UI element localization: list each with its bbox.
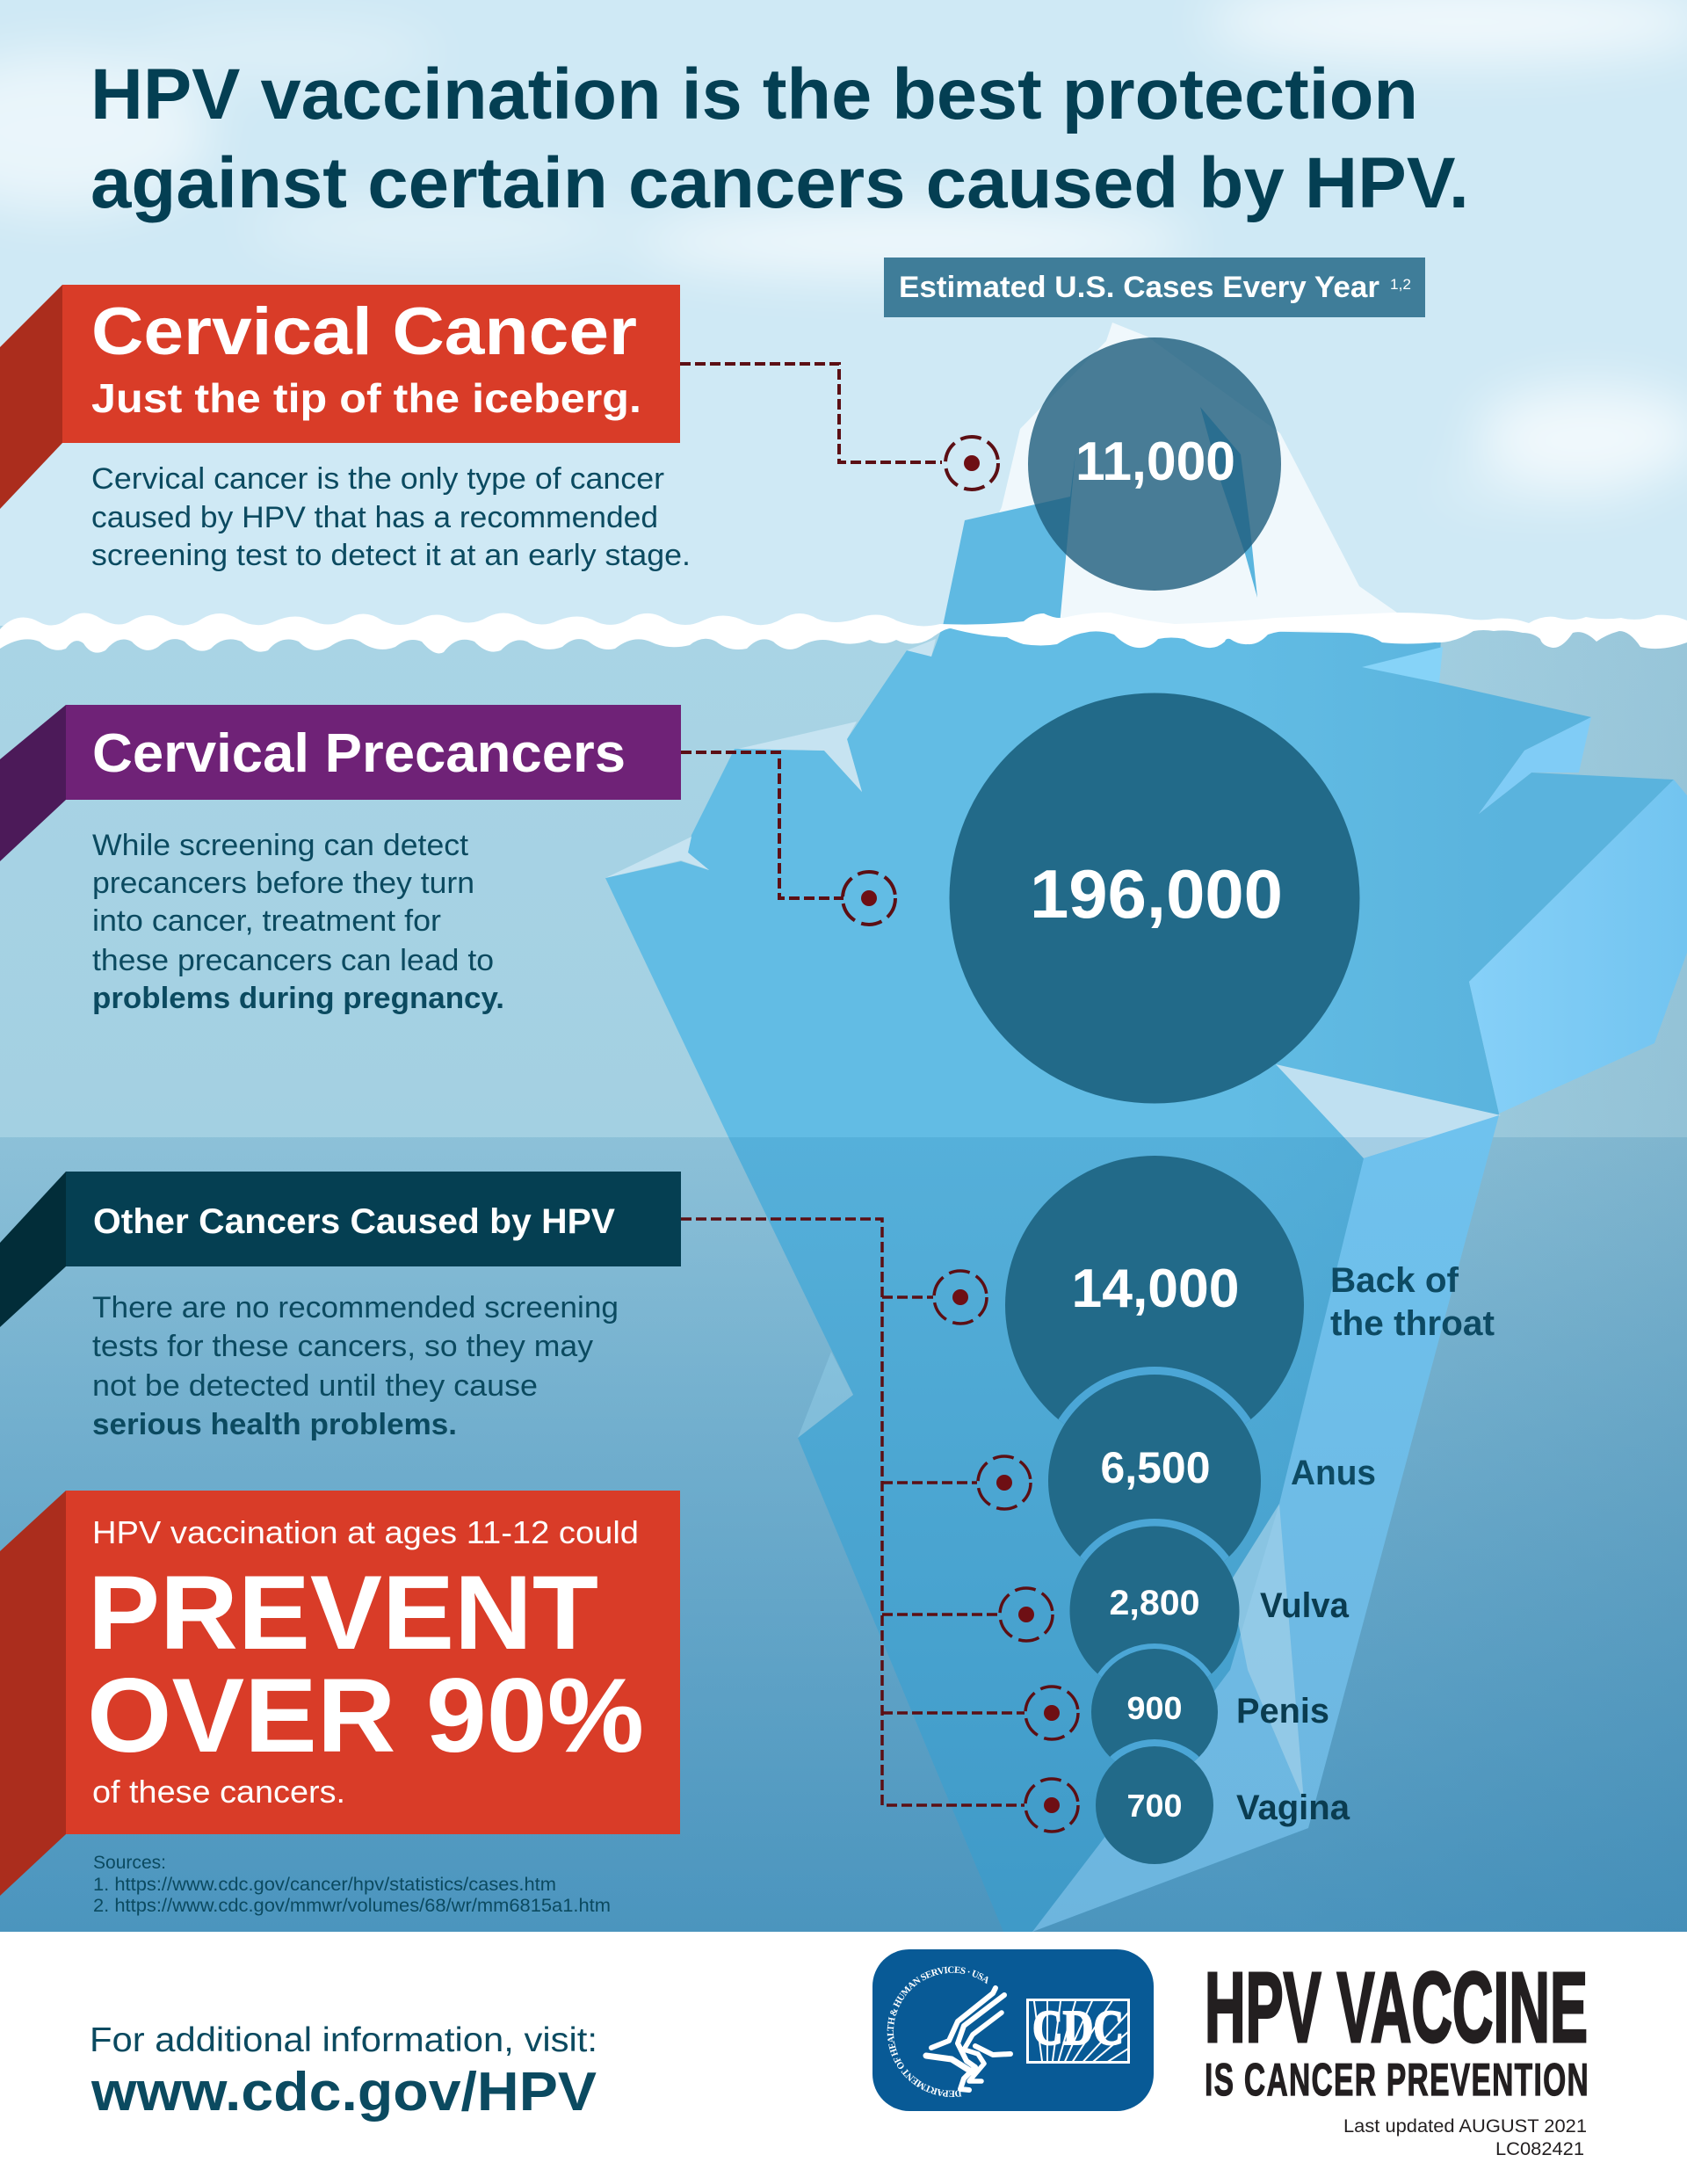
text: other cancers description: tests for these cancers, so they may [92,1330,593,1363]
text: additional information [90,2021,597,2122]
circle: 6,500 anus: 6,500 [1100,1443,1211,1492]
darker deep water overlay [0,1137,1687,1932]
iceberg above water [941,323,1450,635]
iceberg lower right facets [1032,1115,1499,1932]
title: HPV vaccination is the best protection [91,54,1418,134]
circle: 900 penis: 900 [1126,1690,1183,1726]
circle: 6,500 anus: Anus [1291,1454,1376,1492]
panel: other cancers [0,1172,681,1327]
text: cervical cancer description: screening test to detect it at an early stage. [91,539,691,572]
panel: estimated cases label: 1,2 [1390,276,1411,293]
text: sources: 1. https://www.cdc.gov/cancer/hpv/statistics/cases.htm [93,1875,556,1895]
connector: cervical cancer [680,364,998,490]
circle: 14,000 back of the throat: Back of [1330,1261,1459,1300]
text: other cancers description: not be detected until they cause [92,1369,538,1403]
text: sources: Sources: [93,1853,166,1873]
icon: HHS eagle: DEPARTMENT OF HEALTH & HUMAN SERVICES · USA [887,1967,988,2097]
circle: 196,000 [949,693,1360,1104]
panel: cervical cancer: Cervical Cancer [91,294,637,369]
text: sources [93,1853,611,1916]
connector: precancers [681,752,895,925]
text: precancers description: While screening can detect [92,829,469,862]
circle: 11,000: 11,000 [1075,432,1235,492]
panel: prevent over 90%: PREVENT [88,1554,598,1672]
panel: cervical cancer [0,285,680,509]
panel: prevent over 90% [0,1491,680,1896]
text: sources: 2. https://www.cdc.gov/mmwr/volumes/68/wr/mm6815a1.htm [93,1896,611,1916]
circle: 11,000 [1028,337,1281,591]
panel: other cancers: Other Cancers Caused by HPV [93,1202,615,1241]
panel: cervical precancers [0,705,681,861]
text: other cancers description: serious health problems. [92,1408,457,1441]
text: precancers description: these precancers can lead to [92,944,494,977]
title [91,54,1469,223]
text: additional information: www.cdc.gov/HPV [91,2062,597,2122]
text: precancers description: problems during pregnancy. [92,982,504,1015]
circle: 700 vagina: Vagina [1236,1789,1350,1827]
text: cervical cancer description: Cervical cancer is the only type of cancer [91,462,664,496]
circle: 14,000 back of the throat [1005,1156,1494,1424]
circle: 14,000 back of the throat: 14,000 [1072,1259,1239,1319]
text: last updated: Last updated AUGUST 2021 [1343,2116,1587,2137]
circle: 900 penis: Penis [1236,1692,1329,1731]
circle: 14,000 back of the throat: the throat [1330,1304,1495,1343]
panel: estimated cases label: Estimated U.S. Cases Every Year [899,271,1379,304]
circle: 196,000: 196,000 [1030,855,1283,932]
panel: prevent over 90%: of these cancers. [92,1774,345,1810]
panel: prevent over 90%: OVER 90% [87,1657,644,1774]
circle: 2,800 vulva: 2,800 [1109,1584,1200,1622]
title: against certain cancers caused by HPV. [91,143,1469,223]
text: last updated: LC082421 [1495,2139,1584,2159]
text: precancers description: into cancer, treatment for [92,904,441,938]
logo: HHS and CDC [872,1949,1154,2111]
text: precancers description: precancers before they turn [92,867,474,900]
circle: 2,800 vulva [1070,1526,1350,1677]
circle: 700 vagina: 700 [1126,1788,1183,1824]
water background [0,626,1687,1932]
campaign wordmark [1205,1952,1589,2106]
connector: other cancers [681,1219,1078,1832]
foam waterline [0,613,1687,654]
panel: prevent over 90%: HPV vaccination at ages 11-12 could [92,1514,639,1550]
text: other cancers description [92,1291,619,1441]
text: other cancers description: There are no recommended screening [92,1291,619,1324]
circle: 2,800 vulva: Vulva [1260,1586,1350,1625]
text: precancers description [92,829,504,1015]
text: cervical cancer description: caused by HPV that has a recommended [91,501,658,534]
circle: 900 penis [1091,1649,1329,1761]
icon: CDC box: CDC [1032,2001,1124,2056]
text: last updated [1343,2116,1587,2159]
iceberg below water [605,626,1687,1932]
panel: cervical cancer: Just the tip of the iceberg. [91,375,641,421]
text: additional information: For additional information, visit: [90,2021,597,2059]
footer background [0,1932,1687,2184]
sky background [0,0,1687,668]
circle: 6,500 anus [1048,1375,1374,1562]
text: cervical cancer description [91,462,691,572]
circle: 700 vagina [1096,1746,1350,1864]
panel: cervical precancers: Cervical Precancers [92,723,626,784]
panel: estimated cases label [884,258,1425,317]
